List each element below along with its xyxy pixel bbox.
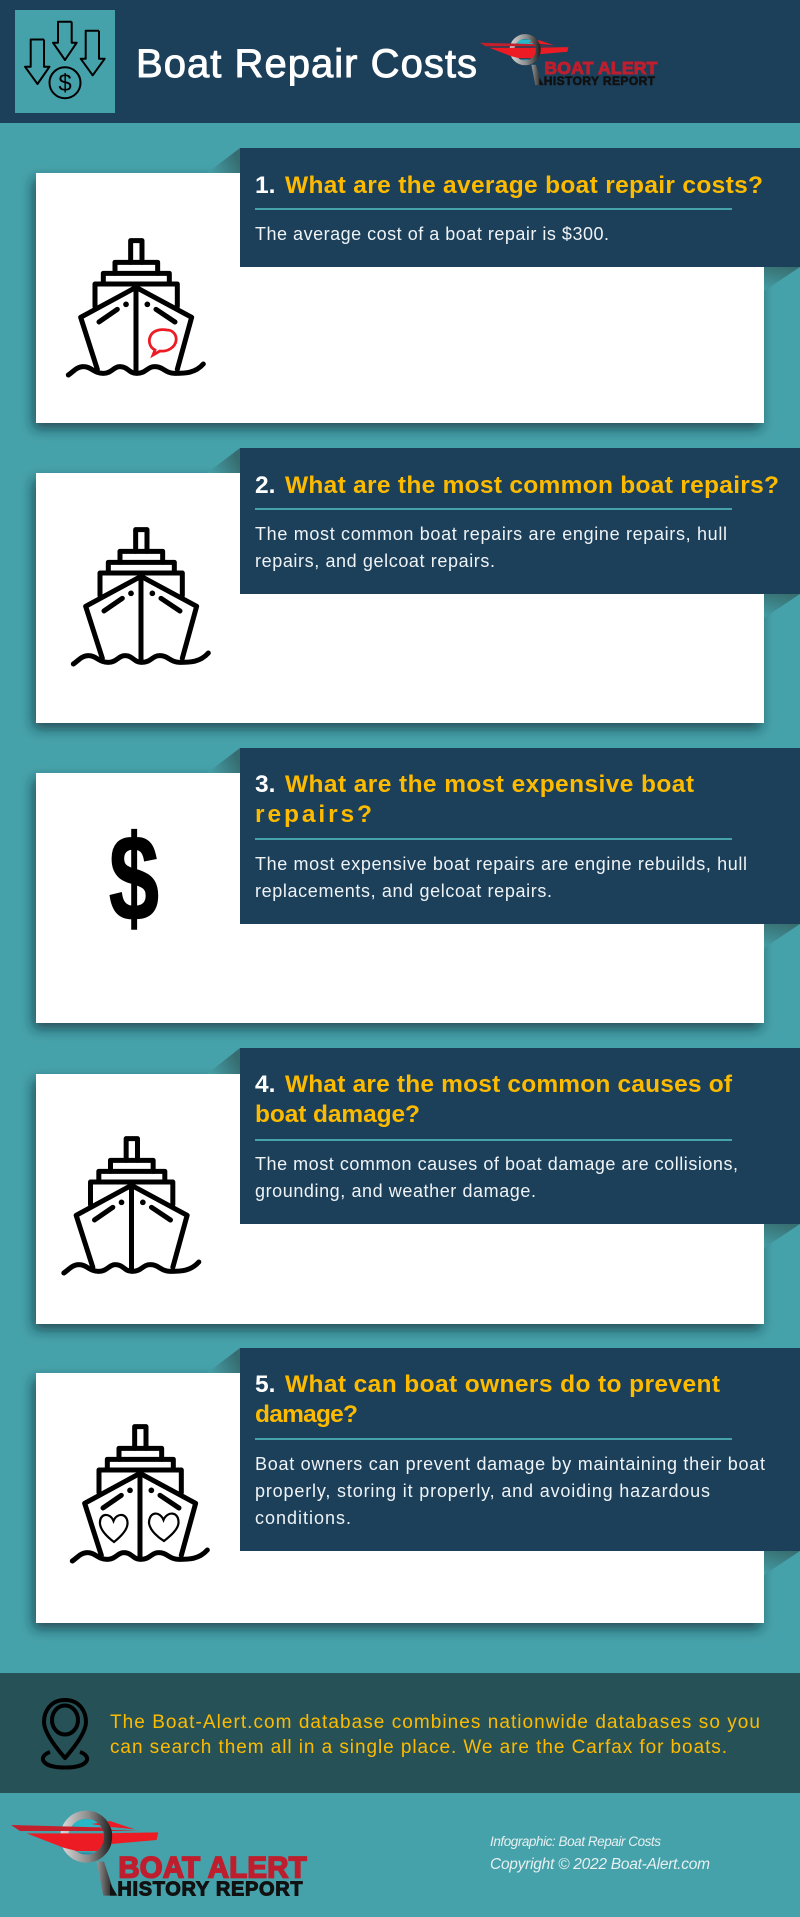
heading: damage? [255, 1401, 358, 1428]
body text: grounding, and weather damage. [255, 1181, 536, 1201]
callout text [110, 1712, 760, 1758]
body text: The most expensive boat repairs are engine rebuilds, hull [255, 854, 747, 874]
heading: What are the most common causes of [285, 1071, 733, 1098]
callout text: can search them all in a single place. We are the Carfax for boats. [110, 1737, 727, 1758]
logo: header [480, 36, 658, 88]
logo: footer [11, 1815, 307, 1901]
heading: repairs? [255, 801, 372, 828]
callout text: The Boat-Alert.com database combines nationwide databases so you [110, 1712, 760, 1733]
body text: properly, storing it properly, and avoiding hazardous [255, 1481, 710, 1501]
footer credits [490, 1834, 710, 1873]
heading: 5. [255, 1371, 275, 1398]
logo: footer: BOAT ALERT [118, 1851, 307, 1884]
body text [255, 1154, 738, 1201]
body text: The most common causes of boat damage are collisions, [255, 1154, 738, 1174]
logo: header: BOAT ALERT [544, 58, 658, 78]
heading: What are the most common boat repairs? [285, 472, 779, 499]
panel: question 4 [36, 1048, 800, 1324]
icon: falling arrows and dollar coin [15, 10, 115, 113]
body text: The average cost of a boat repair is $300. [255, 224, 609, 244]
heading [255, 1371, 720, 1428]
heading [255, 771, 694, 828]
logo: footer: HISTORY REPORT [117, 1879, 303, 1901]
icon: ship with hearts [72, 1427, 207, 1561]
heading [255, 1071, 733, 1128]
heading: boat damage? [255, 1101, 420, 1128]
heading: 1. [255, 172, 275, 199]
icon: falling arrows and dollar coin: $ [58, 70, 72, 97]
icon: ship with hull damage [68, 241, 203, 375]
heading: What are the average boat repair costs? [285, 172, 763, 199]
footer credits: Infographic: Boat Repair Costs [490, 1834, 661, 1849]
icon: location pin [43, 1700, 87, 1768]
panel: question 1 [36, 148, 800, 423]
heading: What can boat owners do to prevent [285, 1371, 720, 1398]
body text: The most common boat repairs are engine repairs, hull [255, 524, 727, 544]
body text: repairs, and gelcoat repairs. [255, 551, 495, 571]
logo: header: HISTORY REPORT [544, 74, 656, 88]
heading: 4. [255, 1071, 275, 1098]
body text [255, 854, 747, 901]
body text [255, 1454, 765, 1528]
body text [255, 524, 727, 571]
callout band [0, 1673, 800, 1793]
body text: conditions. [255, 1508, 351, 1528]
icon: ship [73, 530, 208, 664]
panel: question 5 [36, 1348, 800, 1623]
body text: Boat owners can prevent damage by maintaining their boat [255, 1454, 765, 1474]
title: Boat Repair Costs [136, 42, 477, 86]
body text: replacements, and gelcoat repairs. [255, 881, 552, 901]
panel: question 2 [36, 448, 800, 723]
heading: 3. [255, 771, 275, 798]
heading: What are the most expensive boat [285, 771, 694, 798]
heading: 2. [255, 472, 275, 499]
icon: ship [64, 1139, 199, 1273]
header band [0, 0, 800, 123]
icon: dollar sign: $ [109, 810, 159, 946]
panel: question 3 [36, 748, 800, 1023]
footer credits: Copyright © 2022 Boat-Alert.com [490, 1856, 710, 1873]
